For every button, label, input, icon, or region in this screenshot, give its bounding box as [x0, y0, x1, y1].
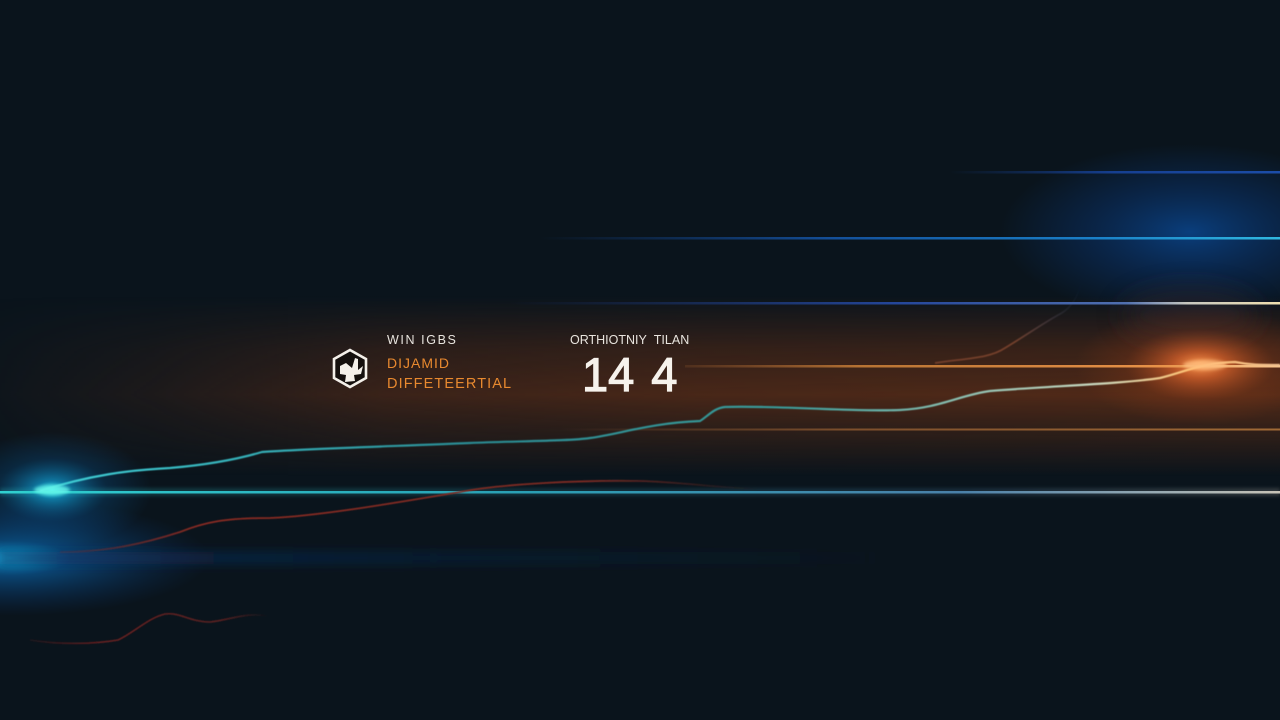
faint red trace upper right	[935, 262, 1083, 363]
label: small white heading: WIN IGBS	[387, 333, 457, 347]
blue glow top right	[1000, 144, 1280, 320]
cyan glow left	[0, 432, 152, 548]
icon: hexagon badge	[332, 348, 368, 388]
teal trend line	[40, 362, 1280, 491]
warm band	[36, 305, 1280, 466]
blue glow lower left	[0, 500, 210, 616]
horizontal light lines	[0, 171, 1280, 496]
red trend line	[60, 481, 760, 552]
background and light-trail chart	[0, 152, 1280, 645]
label: small white heading right: ORTHIOTNIY TILAN	[570, 333, 689, 347]
label: orange title line one: DIJAMID	[387, 355, 450, 371]
orange glow	[1075, 305, 1280, 425]
big number: 14 4	[582, 348, 677, 401]
label: orange title line two: DIFFETEERTIAL	[387, 376, 512, 392]
hot spots	[34, 485, 70, 495]
faint blue band	[0, 552, 900, 564]
lower red trace	[30, 614, 268, 643]
smoke patch near orange glow	[1120, 287, 1260, 343]
